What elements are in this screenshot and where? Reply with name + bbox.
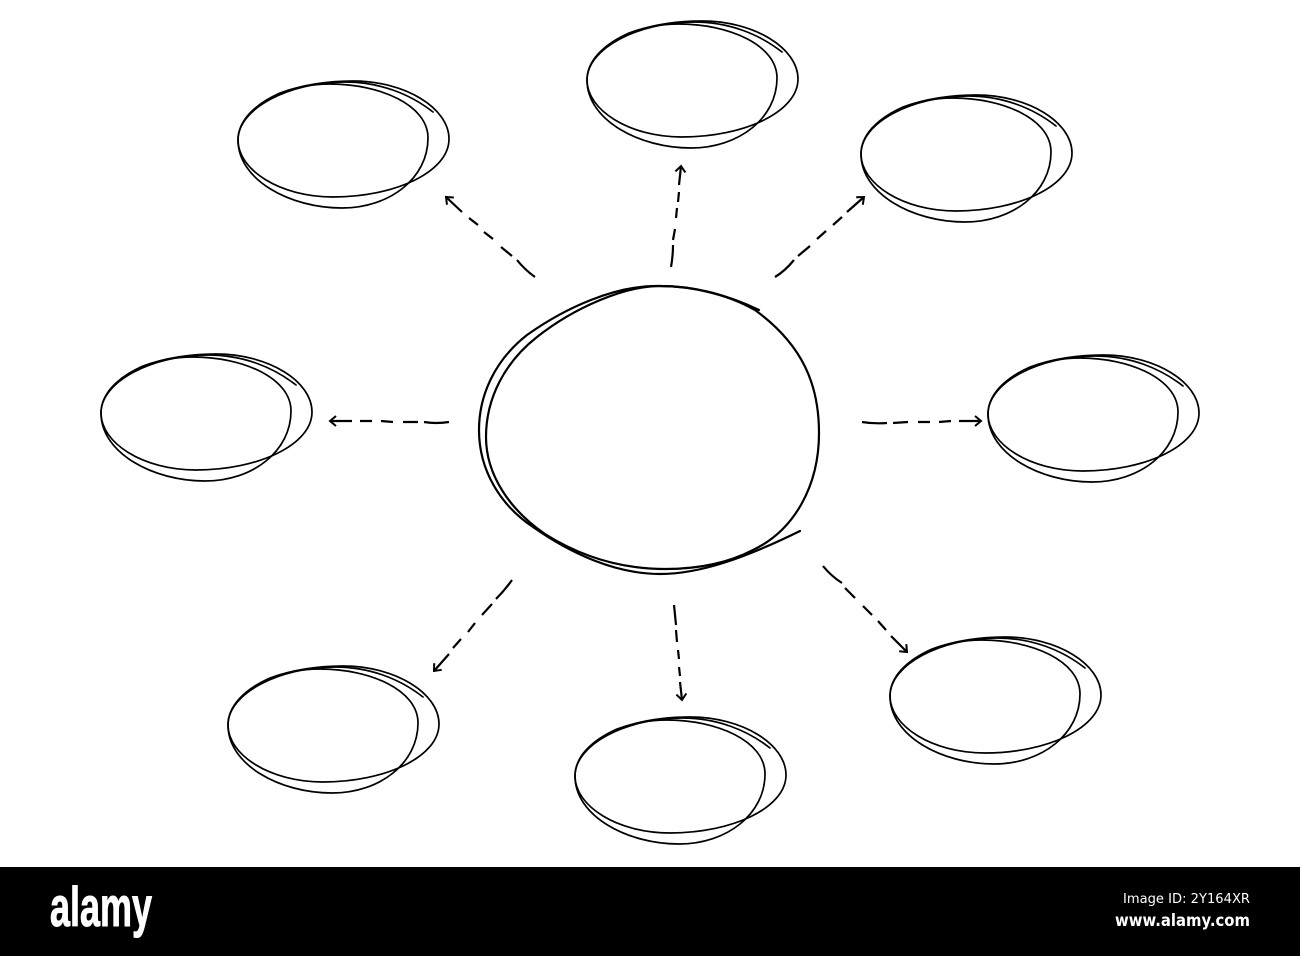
image id: Image ID: 2Y164XR [1123, 892, 1250, 907]
oval: left [101, 354, 312, 481]
footer logo: alamy [50, 875, 152, 938]
arrow: to bottom right [823, 566, 907, 652]
central circle [479, 286, 819, 574]
arrow: to left [330, 421, 449, 423]
arrow: to bottom left [434, 580, 512, 671]
oval: bottom right [890, 637, 1101, 764]
arrow: to bottom [674, 605, 682, 700]
arrow: to top [671, 166, 681, 267]
arrow: to right [862, 421, 981, 423]
oval: top left [238, 81, 449, 208]
oval: bottom left [228, 666, 439, 793]
website: www.alamy.com [1115, 911, 1250, 931]
oval: top [587, 21, 798, 148]
arrow: to top left [446, 197, 535, 277]
oval: top right [861, 95, 1072, 222]
oval: right [988, 355, 1199, 482]
footer bar [0, 867, 1300, 956]
oval: bottom [575, 717, 786, 844]
arrow: to top right [775, 197, 864, 277]
